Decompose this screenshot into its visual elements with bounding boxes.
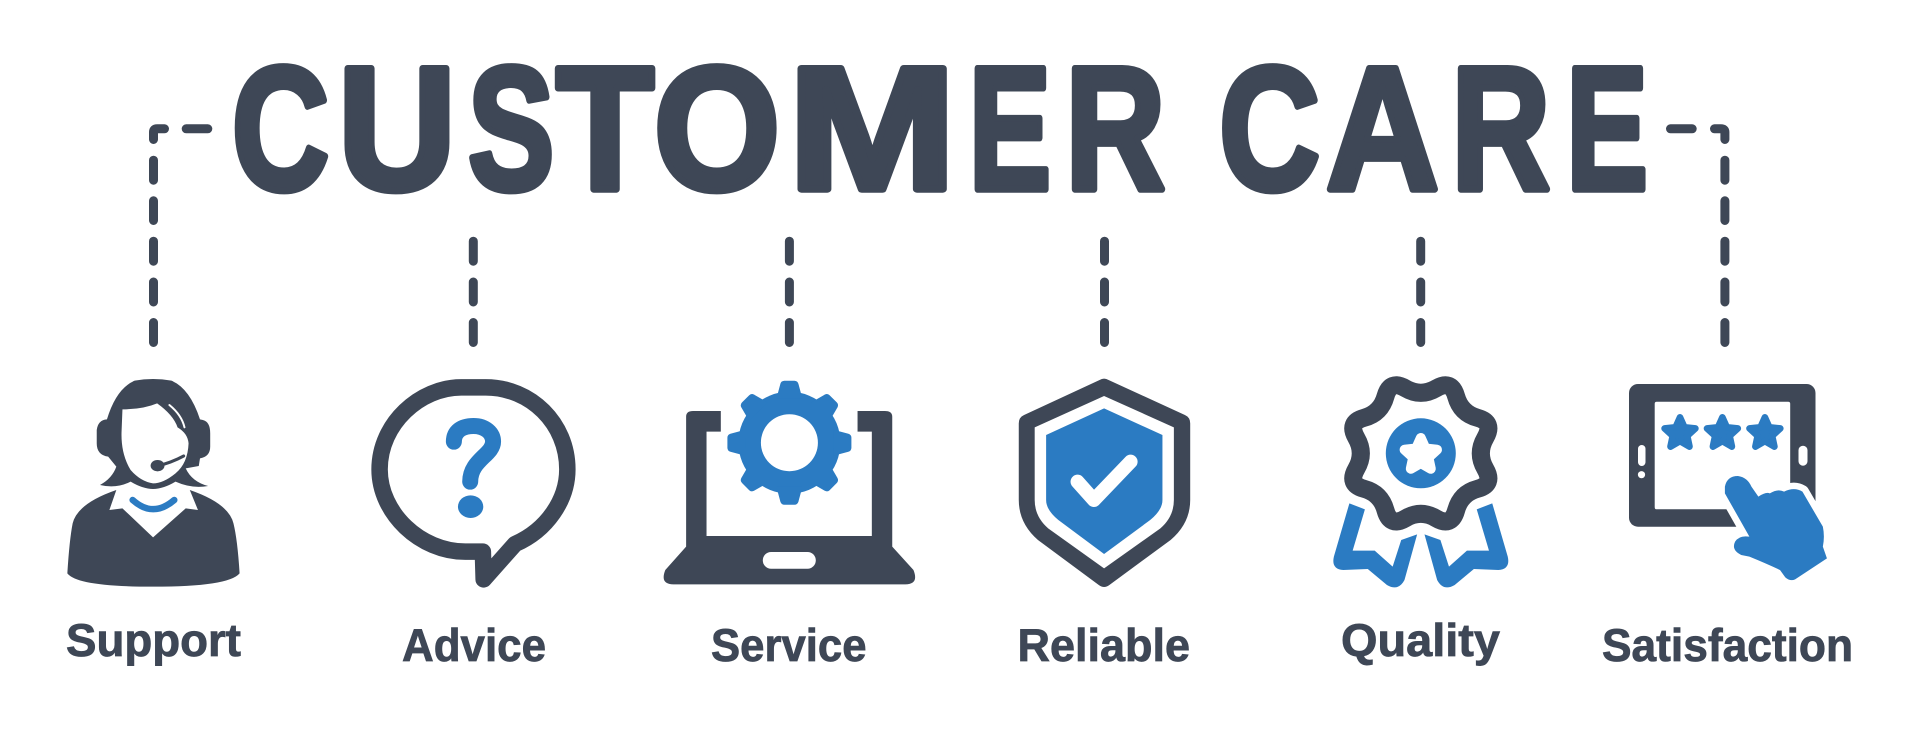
ribbon left — [1333, 503, 1417, 587]
laptop — [664, 411, 915, 584]
pointing hand — [1725, 476, 1827, 580]
shield gap — [1035, 396, 1174, 568]
tablet screen — [1655, 402, 1790, 509]
rating stars — [1665, 417, 1780, 447]
title: C — [232, 31, 329, 227]
tablet frame — [1629, 384, 1816, 527]
question mark — [454, 426, 493, 482]
icon: advice speech bubble — [380, 387, 567, 579]
title: M — [788, 31, 956, 227]
microphone — [157, 456, 184, 466]
title: A — [1326, 31, 1439, 227]
shield outer — [1019, 379, 1190, 587]
ribbon right — [1424, 503, 1508, 587]
bubble outline — [380, 387, 567, 579]
laptop trackpad — [763, 552, 816, 569]
face — [122, 403, 189, 483]
smile — [133, 500, 174, 509]
hair strand — [169, 405, 184, 427]
icon: satisfaction tablet with hand — [1629, 384, 1827, 580]
title: R — [1451, 31, 1550, 227]
title: E — [969, 31, 1051, 227]
icon: reliable shield — [1019, 379, 1190, 587]
check mark — [1078, 462, 1131, 500]
icon: support agent — [67, 379, 240, 587]
dashed connectors — [154, 129, 1725, 342]
tablet buttons — [1638, 445, 1646, 466]
hair and headset — [97, 379, 210, 489]
icon: quality rosette — [1333, 385, 1508, 587]
medallion star — [1405, 438, 1437, 469]
title: O — [654, 31, 780, 227]
label: Satisfaction: Satisfaction — [1602, 619, 1853, 671]
title: C — [1219, 31, 1320, 227]
title: E — [1566, 31, 1648, 227]
title: U — [338, 31, 456, 227]
medallion — [1386, 418, 1456, 488]
label: Support: Support — [66, 614, 241, 666]
icon: service laptop with gear — [664, 381, 915, 584]
agent body — [67, 490, 240, 587]
shield inner — [1046, 408, 1162, 554]
label: Advice: Advice — [402, 619, 546, 671]
label: Reliable: Reliable — [1018, 619, 1190, 671]
label: Service: Service — [711, 619, 866, 671]
label: Quality: Quality — [1341, 614, 1500, 666]
title: R — [1065, 31, 1165, 227]
title: T — [556, 31, 654, 227]
title: S — [468, 31, 554, 227]
rosette outline — [1353, 385, 1488, 521]
gear — [727, 381, 851, 505]
